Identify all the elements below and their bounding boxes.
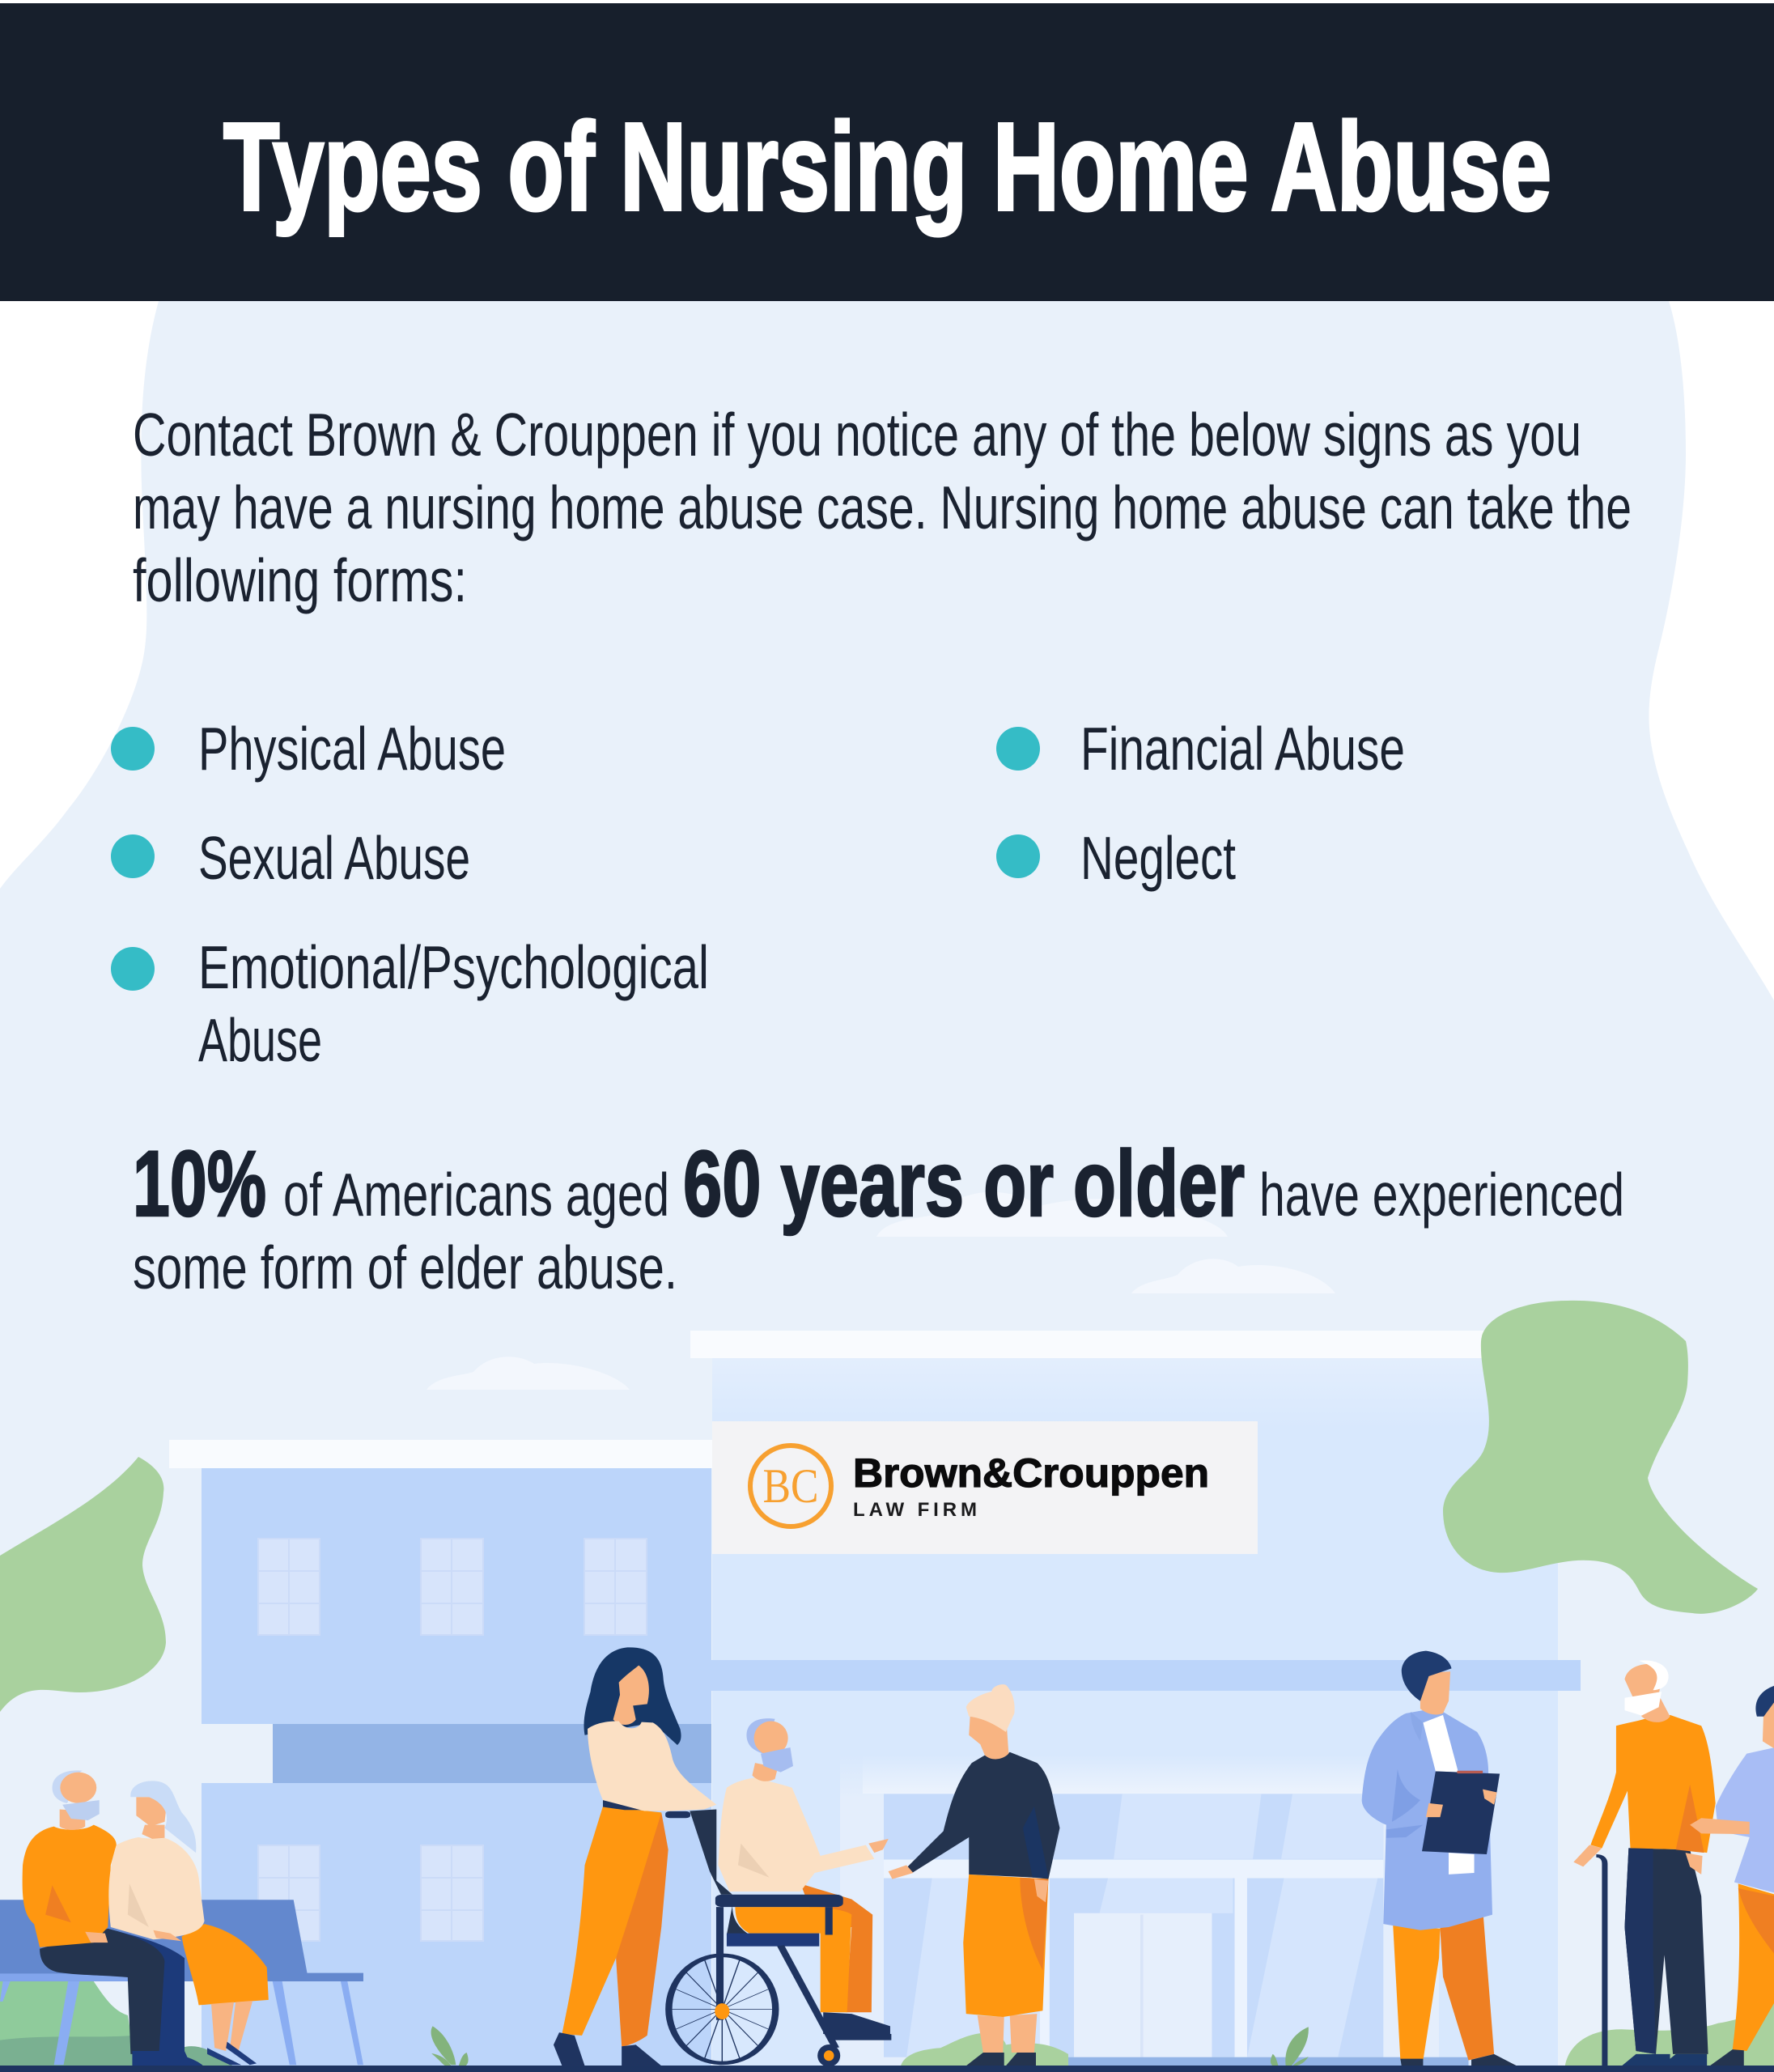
- statistic: of Americans aged: [283, 1161, 669, 1229]
- illustration: right group: [889, 1651, 1774, 2066]
- logo mark: [750, 1446, 831, 1526]
- bullet: sexual abuse: [111, 824, 470, 892]
- ground line: [0, 2066, 1774, 2072]
- green tree left: [0, 1457, 166, 1712]
- seated man's legs: [735, 1883, 890, 2034]
- logo sign: [712, 1421, 1258, 1554]
- bullet: neglect: [996, 824, 1236, 892]
- bullet: emotional abuse: Emotional/Psychological: [198, 933, 709, 1001]
- bullet list: left column: [111, 715, 709, 1074]
- intro paragraph: following forms:: [133, 546, 467, 614]
- windows: [258, 1539, 647, 1941]
- illustration: left group: [0, 1770, 363, 2066]
- bench: [0, 1900, 363, 2065]
- seated elderly man: [23, 1770, 203, 2066]
- illustration: plant left: [431, 2026, 469, 2066]
- logo wordmark: Brown&Crouppen: [853, 1450, 1209, 1496]
- statistic: 60 years or older: [683, 1132, 1245, 1236]
- wheelchair: [665, 1810, 891, 2067]
- logo mark: BC: [762, 1459, 819, 1513]
- standing elderly woman: [889, 1684, 1059, 2066]
- seated elderly woman: [108, 1781, 269, 2065]
- elderly man with cane: [1573, 1660, 1716, 2066]
- wheel: [668, 1955, 775, 2063]
- bullet list: right column: [996, 715, 1405, 892]
- cloud left: [427, 1357, 630, 1390]
- illustration: caregiver and wheelchair: [554, 1647, 891, 2067]
- wheelchair man torso and head: [718, 1718, 889, 1892]
- bush at woman's feet: [901, 2032, 1068, 2066]
- bullet: financial abuse: [996, 715, 1405, 783]
- statistic: some form of elder abuse.: [133, 1233, 677, 1301]
- bullet: sexual abuse: Sexual Abuse: [198, 824, 470, 892]
- green tree right: [1443, 1301, 1758, 1614]
- entrance: [840, 1755, 1469, 2066]
- bullet: financial abuse: Financial Abuse: [1080, 715, 1405, 783]
- left building: [169, 1440, 712, 2066]
- intro paragraph: [133, 401, 1632, 614]
- bushes behind bench: [0, 1981, 233, 2066]
- bullet: emotional abuse: [111, 933, 709, 1074]
- cloud right: [1131, 1259, 1335, 1293]
- bush right: [1565, 2003, 1774, 2066]
- caregiver woman: [554, 1647, 716, 2066]
- right building: [690, 1331, 1581, 2070]
- plant center: [1271, 2027, 1309, 2066]
- bullet: physical abuse: Physical Abuse: [198, 715, 506, 783]
- cloud behind statistic: [876, 1192, 1228, 1237]
- statistic: have experienced: [1259, 1161, 1624, 1229]
- doctor: [1362, 1651, 1517, 2066]
- bullet: physical abuse: [111, 715, 506, 783]
- bullet: emotional abuse: Abuse: [198, 1006, 322, 1074]
- header banner: [0, 3, 1774, 301]
- statistic: 10%: [133, 1132, 266, 1236]
- statistic: [133, 1132, 1624, 1301]
- logo subline: LAW FIRM: [853, 1499, 977, 1521]
- bullet: neglect: Neglect: [1080, 824, 1236, 892]
- woman at right edge: [1690, 1685, 1774, 2066]
